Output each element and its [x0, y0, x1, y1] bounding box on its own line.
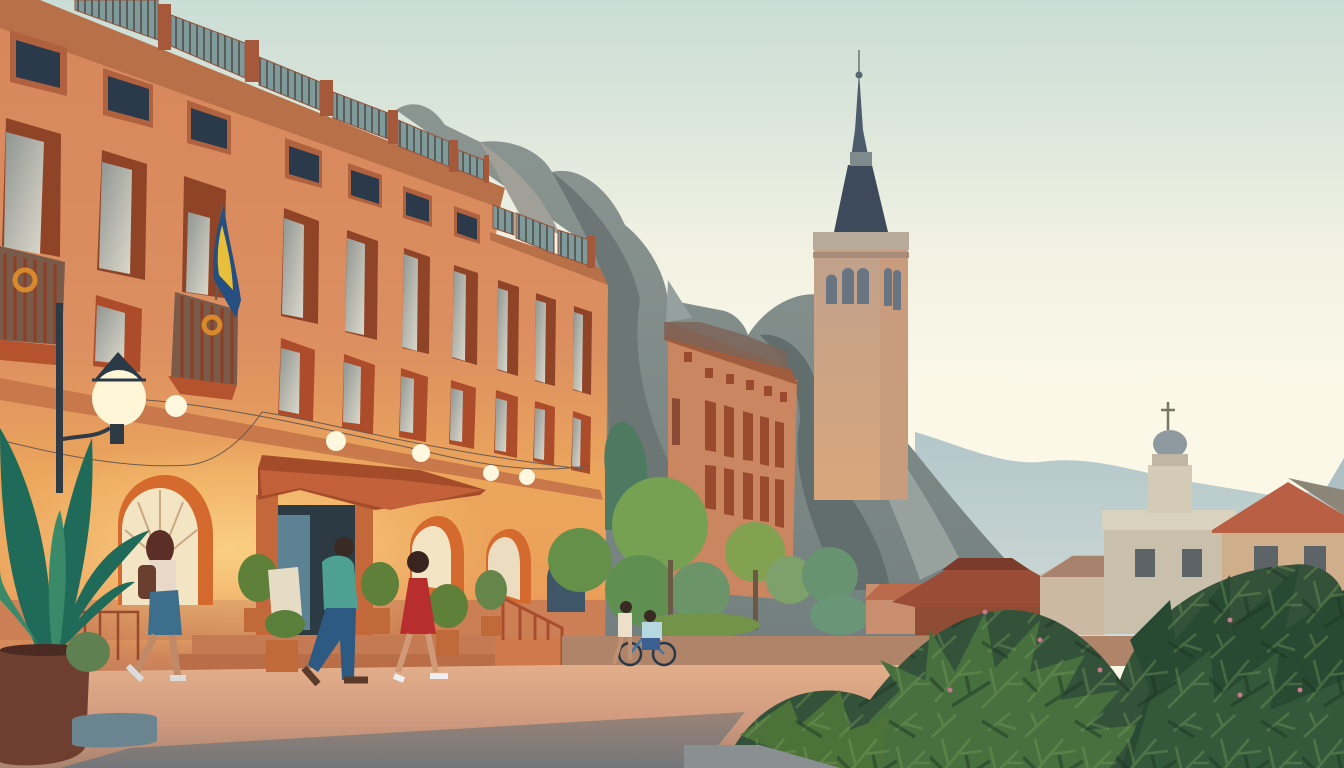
large potted agave plant — [0, 428, 150, 765]
flag — [213, 205, 241, 318]
children with bicycle — [614, 601, 675, 665]
person: man in teal shirt — [304, 537, 368, 684]
right colonial church building — [1040, 402, 1236, 635]
bell tower — [813, 50, 909, 500]
stone curb right — [684, 745, 840, 768]
person: woman in red dress — [394, 551, 448, 680]
street lamp — [56, 303, 146, 493]
upper small windows — [10, 30, 480, 244]
arches — [118, 475, 585, 612]
distant mountains — [915, 432, 1344, 640]
right pitched roof house — [1212, 478, 1344, 640]
low plaza wall — [562, 636, 1162, 666]
potted shrubs by steps — [238, 554, 507, 672]
roof railings — [75, 0, 595, 268]
person: woman with backpack — [128, 530, 186, 680]
lower windows — [93, 295, 591, 474]
plaza ground — [0, 665, 1000, 768]
entrance steps — [72, 598, 562, 671]
trees and shrubs mid ground — [548, 422, 870, 637]
tall windows — [2, 118, 592, 395]
rear orange building — [664, 322, 798, 600]
main building facade — [0, 0, 608, 672]
stone planter base — [72, 713, 157, 747]
pagoda pavilion — [864, 558, 1089, 635]
foreground bushes right — [735, 564, 1344, 768]
entrance canopy and door — [256, 455, 486, 635]
warm glow on ground floor — [0, 440, 500, 660]
rocky cliffs — [396, 104, 1008, 640]
balconies — [0, 246, 238, 400]
string lights — [0, 395, 590, 485]
